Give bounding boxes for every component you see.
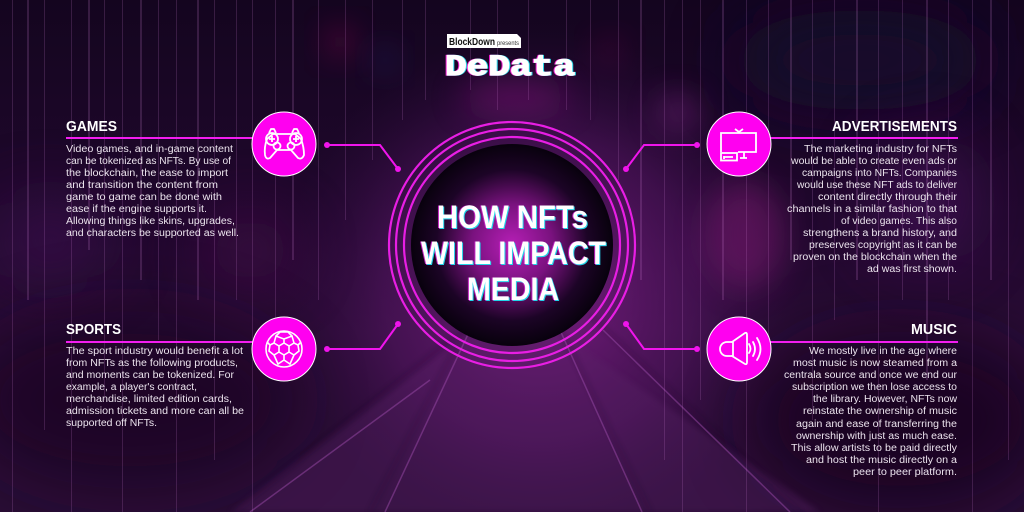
text block: advertisements: strengthens a brand history, and <box>803 228 957 239</box>
text block: games: and transition the content from <box>66 180 218 191</box>
icon: speaker <box>707 317 771 381</box>
text block: sports: admission tickets and more can all be <box>66 406 244 417</box>
panel: advertisements <box>787 119 958 275</box>
panel: music <box>784 322 958 478</box>
text block: games: and characters be supported as well. <box>66 228 239 239</box>
text block: advertisements: would use these NFT ads to deliver <box>796 180 958 191</box>
panel: games <box>66 119 239 239</box>
text block: sports: and moments can be tokenized. For <box>66 370 235 381</box>
text block: advertisements: preserves copyright as it can be <box>809 240 957 251</box>
text block: games: Video games, and in-game content <box>66 144 233 155</box>
icon: football <box>252 317 316 381</box>
text block: music: most music is now steamed from a <box>793 358 957 369</box>
text block: advertisements: proven on the blockchain when the <box>793 252 957 263</box>
text block: sports: supported off NFTs. <box>66 418 157 429</box>
text block: advertisements: would be able to create even ads or <box>790 156 958 167</box>
text block: games: game to game can be done with <box>66 192 222 203</box>
heading: games: GAMES <box>66 119 117 135</box>
text block: music: We mostly live in the age where <box>809 346 957 357</box>
title: WILL IMPACT <box>421 235 606 271</box>
text block: advertisements <box>787 144 958 275</box>
title: MEDIA <box>467 271 559 307</box>
text block: games: Allowing things like skins, upgrades, <box>66 216 235 227</box>
logo: BlockDown presents DeData: DeData <box>445 51 575 85</box>
text block: music: ownership with just as much ease. <box>796 431 957 442</box>
text block: music: peer to peer platform. <box>853 467 957 478</box>
text block: sports: example, a player's contract, <box>66 382 197 393</box>
text block: sports: The sport industry would benefit a lot <box>66 346 243 357</box>
text block: music: This allow artists to be paid directly <box>791 443 957 454</box>
text block: advertisements: The marketing industry for NFTs <box>804 144 957 155</box>
text block: music: the library. However, NFTs now <box>813 394 958 405</box>
text block: sports: from NFTs as the following products, <box>66 358 238 369</box>
text block: games: can be tokenized as NFTs. By use of <box>66 156 231 167</box>
heading: sports: SPORTS <box>66 322 121 338</box>
text block: music: subscription we then lose access to <box>792 382 957 393</box>
heading: music: MUSIC <box>911 322 958 338</box>
text block: games: the blockchain, the ease to import <box>66 168 228 179</box>
central circle with rings <box>389 122 635 368</box>
text block: advertisements: of video games. This also <box>841 216 957 227</box>
heading: advertisements: ADVERTISEMENTS <box>832 119 957 135</box>
logo: BlockDown presents DeData <box>445 34 575 85</box>
text block: advertisements: ad was first shown. <box>867 264 957 275</box>
text block: sports <box>66 346 244 429</box>
text block: music: centrala source and once we end our <box>784 370 958 381</box>
text block: advertisements: campaigns into NFTs. Companies <box>802 168 957 179</box>
text block: advertisements: content directly through their <box>818 192 958 203</box>
title <box>421 199 606 307</box>
text block: music: reinstate the ownership of music <box>803 406 957 417</box>
logo: BlockDown presents DeData: presents <box>497 41 519 47</box>
text block: advertisements: channels in a similar fashion to that <box>787 204 957 215</box>
text block: music: and host the music directly on a <box>806 455 957 466</box>
text block: sports: merchandise, limited edition cards, <box>66 394 232 405</box>
panel: sports <box>66 322 244 429</box>
title: HOW NFTs <box>437 199 588 235</box>
text block: games <box>66 144 239 239</box>
icon: game controller <box>252 112 316 176</box>
text block: music: again and ease of transferring the <box>796 419 957 430</box>
icon: television <box>707 112 771 176</box>
logo: BlockDown presents DeData: BlockDown <box>449 36 495 48</box>
text block: games: ease if the engine supports it. <box>66 204 207 215</box>
connectors: circuit lines <box>324 142 700 352</box>
text block: music <box>784 346 958 478</box>
